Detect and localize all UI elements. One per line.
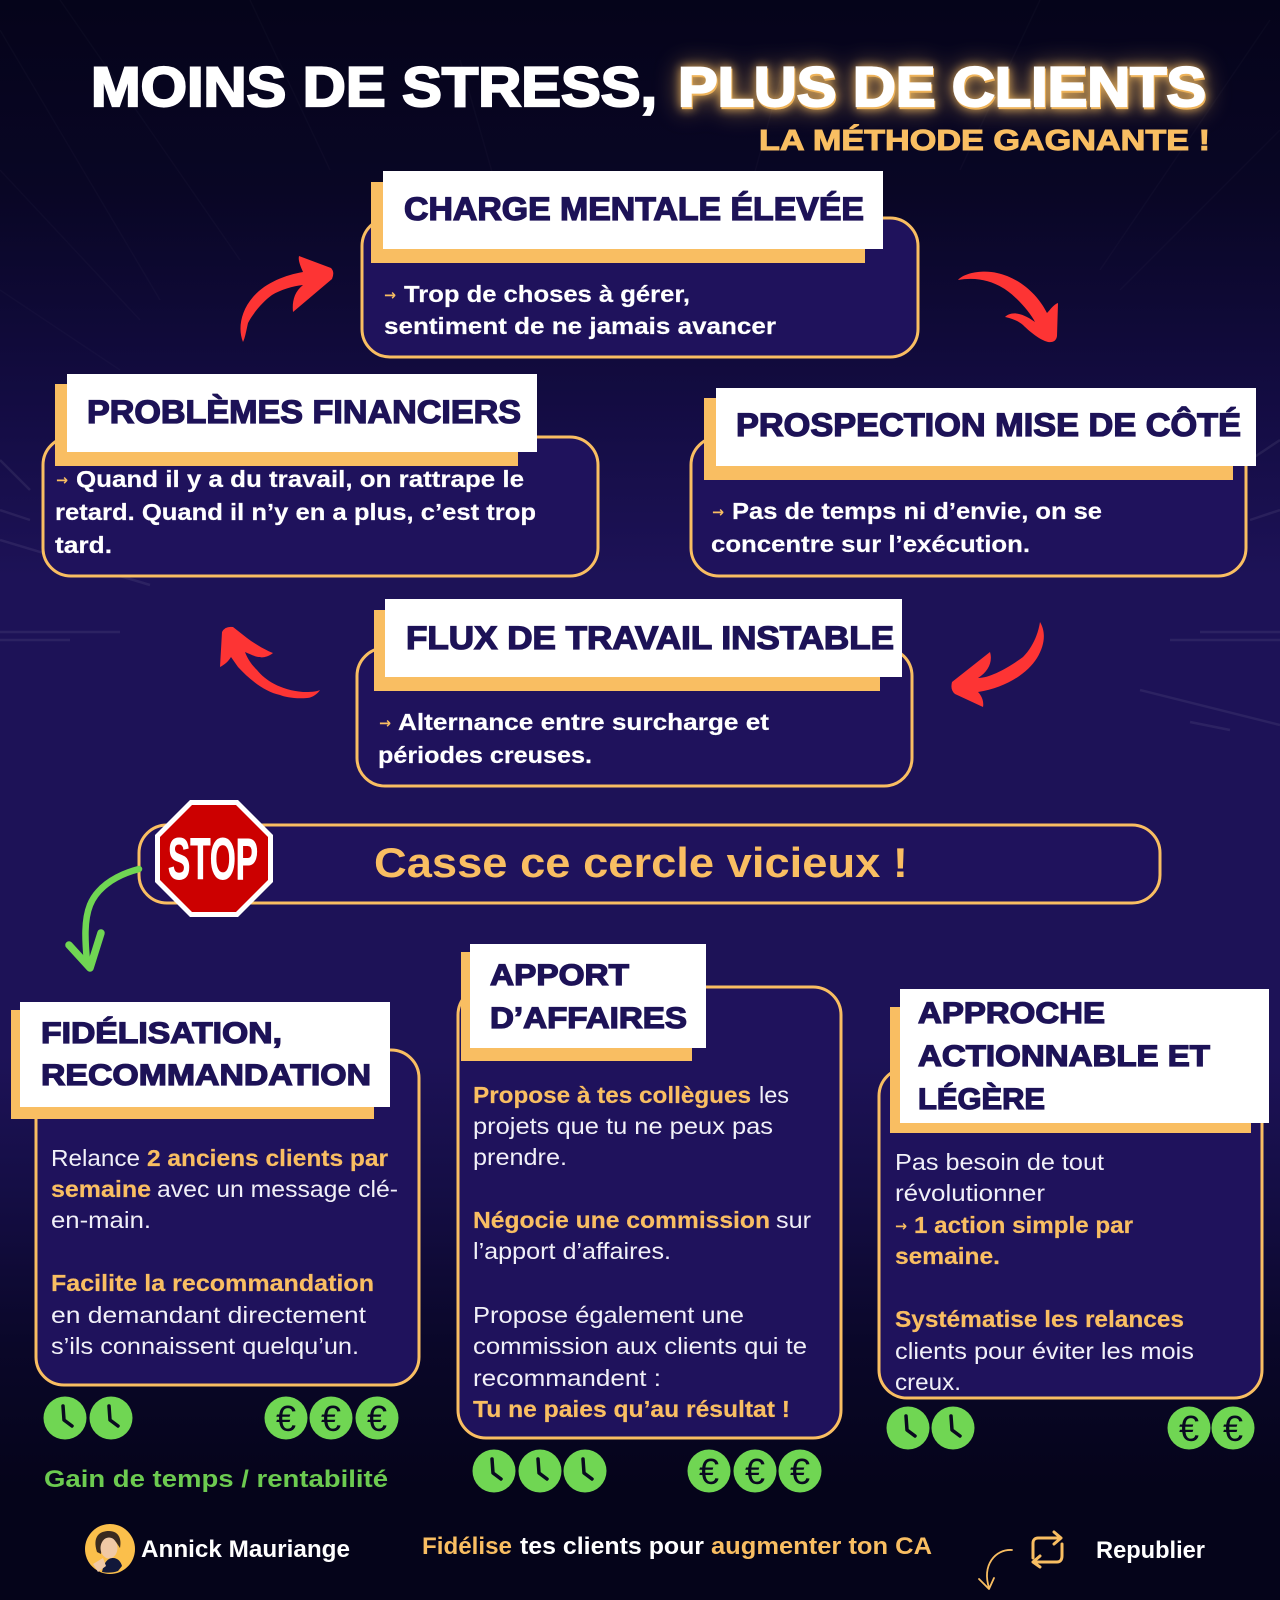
panel: prospection	[691, 388, 1256, 576]
heading: apport d'affaires	[490, 959, 687, 1035]
text: apport d'affaires: recommandent :	[473, 1365, 661, 1391]
icon: repost	[1033, 1532, 1062, 1567]
icons: approche time and money	[886, 1406, 1254, 1450]
icons: apport time and money: €	[745, 1451, 765, 1492]
text: fidélisation: en demandant directement	[51, 1302, 367, 1328]
text: approche actionnable: révolutionner	[895, 1180, 1045, 1206]
card: apport d'affaires	[458, 944, 841, 1438]
title: MOINS DE STRESS,	[91, 55, 657, 118]
heading: approche actionnable	[918, 997, 1210, 1116]
text: flux de travail: périodes creuses.	[378, 742, 592, 768]
text: charge mentale	[384, 281, 776, 339]
icons: apport time and money: €	[699, 1451, 719, 1492]
heading: fidélisation: RECOMMANDATION	[41, 1059, 371, 1092]
text: prospection: Pas de temps ni d’envie, on se	[732, 498, 1102, 524]
heading: apport d'affaires: D’AFFAIRES	[490, 1002, 687, 1035]
icon: stop sign: STOP	[168, 827, 258, 892]
text: problèmes financiers: tard.	[55, 532, 112, 558]
icons: fidélisation time and money: €	[321, 1398, 341, 1439]
text: fidélisation: avec un message clé-	[157, 1176, 398, 1202]
text: apport d'affaires: Négocie une commission	[473, 1207, 770, 1233]
text: prospection: →	[712, 503, 724, 521]
icons: fidélisation time and money: €	[367, 1398, 387, 1439]
panel: flux de travail	[357, 599, 912, 786]
text: fidélisation: 2 anciens clients par	[147, 1145, 388, 1171]
arrow: curved down	[979, 1550, 1012, 1589]
text: apport d'affaires	[473, 1082, 811, 1422]
text: apport d'affaires: Propose également une	[473, 1302, 744, 1328]
text: approche actionnable: →	[895, 1217, 907, 1235]
text: problèmes financiers	[55, 466, 536, 558]
footer tagline: augmenter ton CA	[711, 1533, 932, 1560]
text: apport d'affaires: sur	[776, 1207, 811, 1233]
text: prospection: concentre sur l’exécution.	[711, 531, 1030, 557]
text: flux de travail: →	[379, 714, 391, 732]
legend: gain de temps: Gain de temps / rentabilité	[44, 1466, 388, 1493]
subtitle: LA MÉTHODE GAGNANTE !	[759, 123, 1210, 157]
arrow: green	[69, 869, 139, 968]
heading: fidélisation	[41, 1016, 371, 1092]
icons: fidélisation time and money: €	[276, 1398, 296, 1439]
icons: approche time and money: €	[1179, 1408, 1199, 1449]
text: apport d'affaires: prendre.	[473, 1144, 567, 1170]
text: approche actionnable: 1 action simple par	[914, 1212, 1133, 1238]
text: fidélisation: Relance	[51, 1145, 140, 1171]
icons: approche time and money: €	[1223, 1408, 1243, 1449]
text: fidélisation: s’ils connaissent quelqu’un.	[51, 1333, 359, 1359]
footer tagline: tes clients pour	[520, 1533, 704, 1560]
panel: charge mentale	[362, 171, 918, 357]
republier label: Republier	[1096, 1537, 1205, 1564]
heading: flux de travail: FLUX DE TRAVAIL INSTABLE	[406, 620, 894, 656]
text: apport d'affaires: Propose à tes collègues	[473, 1082, 751, 1108]
text: flux de travail: Alternance entre surcharge et	[398, 709, 769, 735]
text: problèmes financiers: Quand il y a du travail, on rattrape le	[76, 466, 524, 492]
text: flux de travail	[378, 709, 769, 768]
heading: charge mentale: CHARGE MENTALE ÉLEVÉE	[404, 191, 864, 227]
heading: approche actionnable: ACTIONNABLE ET	[918, 1040, 1210, 1073]
text: apport d'affaires: les	[759, 1082, 789, 1108]
card: approche actionnable	[879, 989, 1269, 1398]
panel: problèmes financiers	[43, 374, 598, 576]
text: apport d'affaires: Tu ne paies qu’au résultat !	[473, 1396, 790, 1422]
banner: casse ce cercle vicieux	[139, 825, 1160, 903]
banner text: Casse ce cercle vicieux !	[374, 839, 908, 886]
text: charge mentale: →	[384, 286, 396, 304]
text: approche actionnable: Pas besoin de tout	[895, 1149, 1105, 1175]
title: PLUS DE CLIENTS	[678, 55, 1206, 118]
text: fidélisation	[51, 1145, 398, 1359]
title	[91, 55, 1206, 118]
arrow: vers problèmes	[220, 627, 320, 698]
text: fidélisation: en-main.	[51, 1207, 151, 1233]
text: charge mentale: Trop de choses à gérer,	[404, 281, 690, 307]
arrow: vers prospection	[958, 272, 1058, 342]
heading: apport d'affaires: APPORT	[490, 959, 629, 992]
text: prospection	[711, 498, 1102, 557]
icon: stop sign	[155, 800, 273, 917]
arrow: vers flux	[951, 622, 1044, 707]
heading: fidélisation: FIDÉLISATION,	[41, 1016, 282, 1050]
heading: approche actionnable: APPROCHE	[918, 997, 1105, 1030]
text: apport d'affaires: commission aux clients qui te	[473, 1333, 807, 1359]
author name: Annick Mauriange	[141, 1536, 350, 1563]
text: approche actionnable: clients pour éviter les mois	[895, 1338, 1194, 1364]
author avatar	[85, 1524, 135, 1574]
text: fidélisation: Facilite la recommandation	[51, 1270, 374, 1296]
text: problèmes financiers: retard. Quand il n’y en a plus, c’est trop	[55, 499, 536, 525]
footer tagline: Fidélise	[422, 1533, 512, 1560]
card: fidélisation	[11, 1002, 419, 1385]
icons: apport time and money: €	[790, 1451, 810, 1492]
icons: fidélisation time and money	[44, 1396, 398, 1440]
heading: problèmes financiers: PROBLÈMES FINANCIERS	[87, 394, 521, 430]
text: approche actionnable	[895, 1149, 1194, 1395]
text: fidélisation: semaine	[51, 1176, 151, 1202]
text: approche actionnable: Systématise les relances	[895, 1306, 1184, 1332]
heading: approche actionnable: LÉGÈRE	[918, 1082, 1045, 1116]
text: problèmes financiers: →	[56, 471, 68, 489]
text: approche actionnable: creux.	[895, 1369, 961, 1395]
heading: prospection: PROSPECTION MISE DE CÔTÉ	[736, 407, 1241, 443]
icons: apport time and money	[472, 1450, 822, 1492]
text: approche actionnable: semaine.	[895, 1243, 1000, 1269]
arrow: vers charge mentale	[240, 256, 333, 342]
footer tagline	[422, 1533, 932, 1560]
text: charge mentale: sentiment de ne jamais avancer	[384, 313, 776, 339]
text: apport d'affaires: l’apport d’affaires.	[473, 1238, 671, 1264]
text: apport d'affaires: projets que tu ne peux pas	[473, 1113, 773, 1139]
